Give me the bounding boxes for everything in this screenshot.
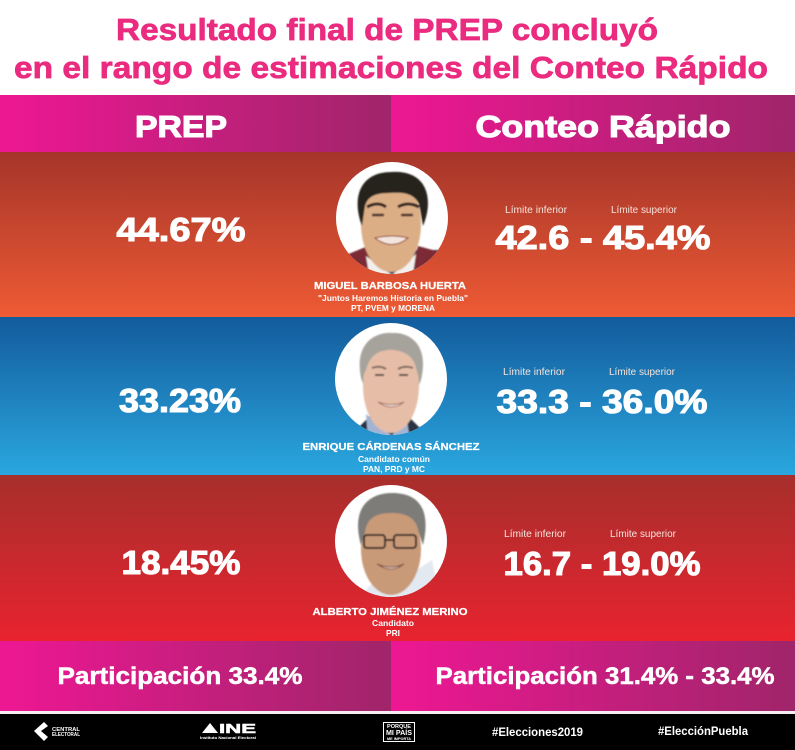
hashtag: EleccionPuebla: #ElecciónPuebla — [658, 726, 749, 738]
panel: Conteo Rápido header — [391, 95, 795, 152]
panel: PREP participation: Participación 33.4% — [58, 663, 302, 690]
logo: Porque mi país me importa: ME IMPORTA — [387, 736, 411, 741]
name: Cárdenas — [302, 440, 480, 474]
name: Barbosa — [314, 280, 468, 313]
name: Jiménez: ALBERTO JIMÉNEZ MERINO — [312, 605, 468, 618]
name: Cárdenas: ENRIQUE CÁRDENAS SÁNCHEZ — [302, 440, 480, 453]
footer bar — [0, 711, 795, 750]
Conteo Rápido range: Cárdenas: Límite superior — [609, 367, 676, 378]
name: Jiménez — [312, 605, 468, 638]
logo: Porque mi país me importa — [384, 722, 414, 742]
Conteo Rápido range: Jiménez: Límite superior — [610, 529, 677, 540]
portrait: Jiménez — [335, 485, 447, 600]
portrait: Barbosa — [336, 162, 448, 285]
logo: INE: INE — [219, 721, 257, 736]
panel: Alberto Jiménez Merino — [0, 475, 795, 641]
name: Cárdenas: PAN, PRD y MC — [363, 465, 425, 474]
PREP value: Jiménez: 18.45% — [122, 544, 240, 581]
logo: Porque mi país me importa: MI PAÍS — [386, 728, 412, 737]
Conteo Rápido range: Jiménez: Límite inferior — [504, 529, 567, 540]
panel: Conteo Rápido header: Conteo Rápido — [476, 109, 730, 144]
Conteo Rápido range: Barbosa: Límite superior — [611, 205, 678, 216]
PREP value: Barbosa: 44.67% — [116, 211, 246, 248]
title: Resultado final de PREP concluyó — [116, 12, 658, 47]
logo: Central Electoral: ELECTORAL — [52, 732, 81, 738]
Conteo Rápido range: Barbosa: Límite inferior — [505, 205, 568, 216]
logo: Porque mi país me importa: PORQUE — [387, 724, 412, 730]
name: Jiménez: PRI — [386, 629, 400, 638]
name: Cárdenas: Candidato común — [358, 455, 430, 464]
name: Jiménez: Candidato — [372, 619, 414, 628]
title: en el rango de estimaciones del Conteo Rápido — [14, 50, 768, 85]
Conteo Rápido range: Jiménez — [504, 529, 700, 582]
hashtag: Elecciones2019: #Elecciones2019 — [492, 727, 583, 739]
panel: PREP header — [0, 95, 391, 152]
panel: Miguel Barbosa Huerta — [0, 152, 795, 317]
panel: Enrique Cárdenas Sánchez — [0, 317, 795, 475]
Conteo Rápido range: Cárdenas — [496, 367, 708, 420]
portrait: Cárdenas — [335, 323, 447, 440]
panel: Conteo Rápido participation — [391, 641, 795, 711]
Conteo Rápido range: Cárdenas: 33.3 - 36.0% — [496, 383, 708, 420]
Conteo Rápido range: Barbosa — [496, 205, 710, 256]
name: Barbosa: MIGUEL BARBOSA HUERTA — [314, 280, 466, 292]
logo: INE: Instituto Nacional Electoral — [200, 735, 256, 740]
name: Barbosa: PT, PVEM y MORENA — [351, 304, 435, 313]
logo: Central Electoral: CENTRAL — [52, 727, 81, 733]
title — [14, 12, 768, 85]
Conteo Rápido range: Jiménez: 16.7 - 19.0% — [504, 545, 700, 582]
Conteo Rápido range: Barbosa: 42.6 - 45.4% — [496, 219, 710, 256]
Conteo Rápido range: Cárdenas: Límite inferior — [503, 367, 566, 378]
panel: PREP header: PREP — [135, 109, 227, 144]
panel: Conteo Rápido participation: Participación 31.4% - 33.4% — [436, 663, 774, 690]
logo: INE — [200, 721, 257, 740]
panel: PREP participation — [0, 641, 391, 711]
PREP value: Cárdenas: 33.23% — [119, 382, 241, 419]
name: Barbosa: "Juntos Haremos Historia en Puebla" — [318, 294, 468, 303]
logo: Central Electoral — [34, 722, 81, 741]
